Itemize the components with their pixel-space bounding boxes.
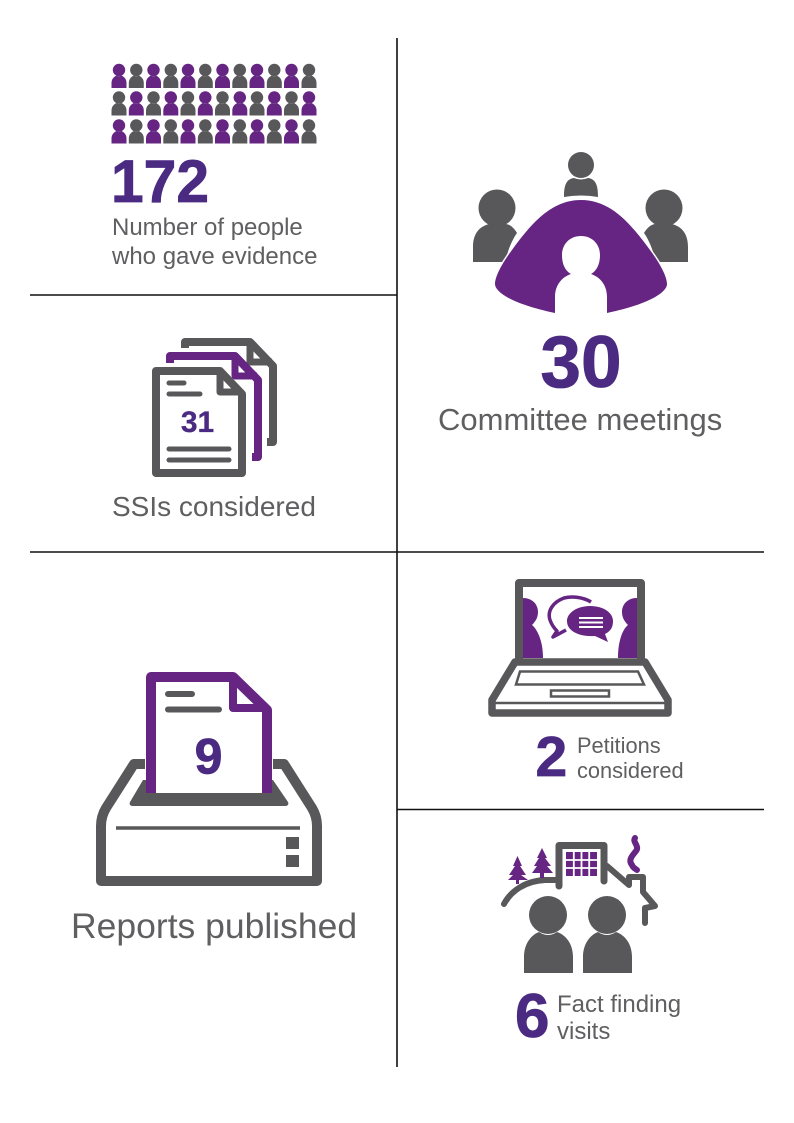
panel: SSIs considered <box>112 342 316 522</box>
label: petitions considered: Petitions <box>577 733 661 758</box>
label: reports published: Reports published <box>71 906 357 946</box>
panel: committee meetings <box>438 152 722 437</box>
label: fact finding visits: visits <box>557 1018 610 1045</box>
panel: reports published <box>71 677 357 946</box>
number: 2: 2 <box>536 725 567 789</box>
number: 30: 30 <box>540 322 622 403</box>
panel: petitions considered <box>492 583 684 789</box>
panel: people who gave evidence <box>111 64 317 270</box>
label: SSIs considered: SSIs considered <box>112 491 316 522</box>
label: number of people who gave evidence: Number of people <box>112 214 303 241</box>
label: committee meetings: Committee meetings <box>438 402 722 437</box>
number: 9: 9 <box>195 728 222 784</box>
icon: people around a table <box>473 152 688 313</box>
panel: fact finding visits <box>504 838 681 1051</box>
label: number of people who gave evidence: who gave evidence <box>111 243 317 270</box>
number: 6: 6 <box>515 982 549 1051</box>
icon: stacked documents <box>156 342 273 473</box>
label: petitions considered: considered <box>577 758 684 783</box>
number: 31: 31 <box>181 406 214 439</box>
icon: visitors, house and trees <box>504 838 655 973</box>
icon: laptop with speech bubbles <box>492 583 668 713</box>
icon: grid of people <box>112 64 316 143</box>
icon: printer with document <box>101 677 317 881</box>
label: fact finding visits: Fact finding <box>557 991 681 1018</box>
number: 172: 172 <box>111 148 209 215</box>
